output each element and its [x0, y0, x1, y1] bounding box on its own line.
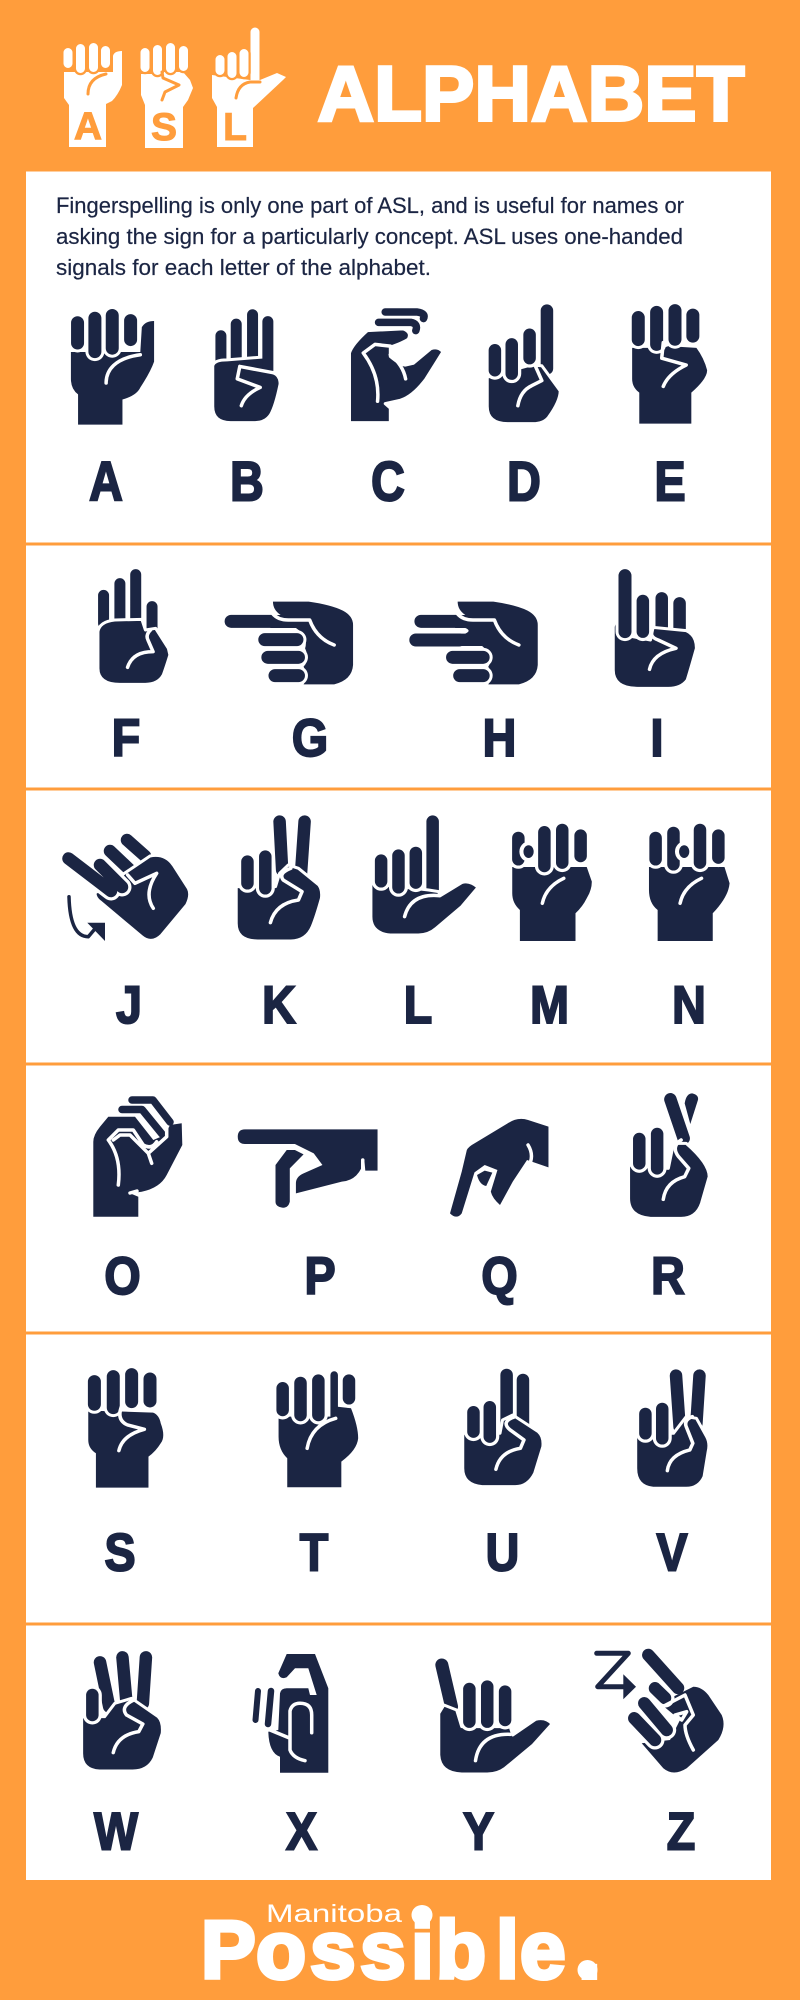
letter A: A — [89, 451, 123, 512]
icon: hand M — [512, 830, 592, 941]
letter M: M — [530, 975, 569, 1035]
sign I — [613, 576, 696, 768]
sign A — [71, 315, 154, 512]
icon: hand F — [98, 575, 170, 684]
icon: hand U — [463, 1375, 543, 1487]
letter N: N — [672, 975, 706, 1035]
icon: hand J — [68, 840, 190, 941]
letter J: J — [116, 975, 142, 1035]
panel: F to I — [26, 546, 771, 788]
intro text — [56, 193, 684, 280]
icon: hand W — [82, 1657, 162, 1771]
intro text: signals for each letter of the alphabet. — [56, 255, 431, 280]
icon: hand T — [279, 1375, 358, 1487]
letter V: V — [656, 1523, 688, 1582]
letter P: P — [304, 1246, 336, 1306]
icon: hand G — [231, 602, 353, 684]
icon: hand P — [238, 1129, 378, 1208]
sign V — [636, 1376, 709, 1582]
letter Z: Z — [667, 1802, 695, 1861]
letter R: R — [651, 1246, 685, 1306]
header: ASL hands and title — [64, 32, 744, 149]
letter I: I — [651, 708, 663, 768]
sign N — [649, 830, 730, 1035]
footer logo: Manitoba Possible: Possible. — [201, 1905, 601, 1996]
letter K: K — [262, 975, 296, 1035]
icon: hand B — [213, 315, 280, 423]
sign U — [463, 1375, 543, 1582]
sign X — [256, 1654, 328, 1861]
icon: header hand S — [141, 48, 193, 149]
sign G — [231, 602, 353, 768]
icon: hand R — [629, 1093, 709, 1218]
icon: header hand L — [212, 32, 286, 149]
icon: hand O — [93, 1100, 182, 1217]
intro text: asking the sign for a particularly concept. ASL uses one-handed — [56, 224, 683, 249]
sign C — [349, 312, 443, 512]
letter X: X — [286, 1802, 317, 1861]
letter Y: Y — [463, 1802, 494, 1861]
letter D: D — [507, 451, 541, 512]
letter H: H — [483, 708, 516, 768]
sign M — [512, 830, 592, 1035]
icon: hand K — [236, 822, 322, 941]
icon: hand C — [349, 312, 443, 423]
letter B: B — [230, 451, 264, 512]
letter U: U — [486, 1523, 519, 1582]
sign T — [279, 1375, 358, 1582]
icon: header hand L: L — [223, 106, 247, 149]
letter E: E — [654, 451, 686, 512]
footer logo: Manitoba Possible: Manitoba — [266, 1900, 402, 1928]
sign F — [98, 575, 170, 768]
letter W: W — [94, 1802, 139, 1861]
sign O — [93, 1100, 182, 1306]
sign D — [487, 311, 560, 512]
letter L: L — [404, 975, 432, 1035]
letter C: C — [371, 451, 405, 512]
icon: hand E — [632, 311, 707, 424]
icon: hand H — [416, 602, 538, 684]
panel: intro and A to E — [26, 172, 771, 542]
icon: header hand A: A — [74, 106, 102, 148]
intro text: Fingerspelling is only one part of ASL, and is useful for names or — [56, 193, 684, 218]
sign P — [238, 1129, 378, 1306]
arrow: J motion — [69, 897, 105, 941]
icon: hand V — [636, 1376, 709, 1488]
title: ALPHABET — [318, 50, 744, 138]
icon: hand Q — [450, 1119, 548, 1217]
icon: hand L — [371, 822, 478, 935]
sign R — [629, 1093, 709, 1306]
icon: header hand A — [64, 48, 122, 148]
sign J — [68, 840, 190, 1035]
letter S: S — [104, 1523, 136, 1582]
panel: S to V — [26, 1334, 771, 1622]
icon: hand Z — [597, 1653, 724, 1772]
sign S — [88, 1375, 163, 1582]
icon: hand Y — [439, 1665, 552, 1774]
sign L — [371, 822, 478, 1035]
panel: O to R — [26, 1066, 771, 1332]
icon: hand N — [649, 830, 730, 941]
panel: J to N — [26, 790, 771, 1062]
icon: hand A — [71, 315, 154, 425]
icon: header hand S: S — [151, 106, 177, 149]
sign Z — [597, 1653, 724, 1861]
panel: W to Z — [26, 1626, 771, 1880]
letter O: O — [104, 1246, 141, 1306]
sign Y — [439, 1665, 552, 1861]
letter Q: Q — [481, 1246, 518, 1306]
sign Q — [450, 1119, 548, 1306]
sign E — [632, 311, 707, 512]
letter F: F — [112, 708, 140, 768]
icon: hand I — [613, 576, 696, 688]
icon: hand X — [256, 1654, 328, 1773]
icon: hand D — [487, 311, 560, 424]
letter G: G — [292, 708, 328, 768]
icon: hand S — [88, 1375, 163, 1488]
sign B — [213, 315, 280, 512]
letter T: T — [300, 1523, 328, 1582]
sign K — [236, 822, 322, 1035]
arrow: Z motion — [597, 1653, 636, 1699]
sign W — [82, 1657, 162, 1861]
sign H — [416, 602, 538, 768]
